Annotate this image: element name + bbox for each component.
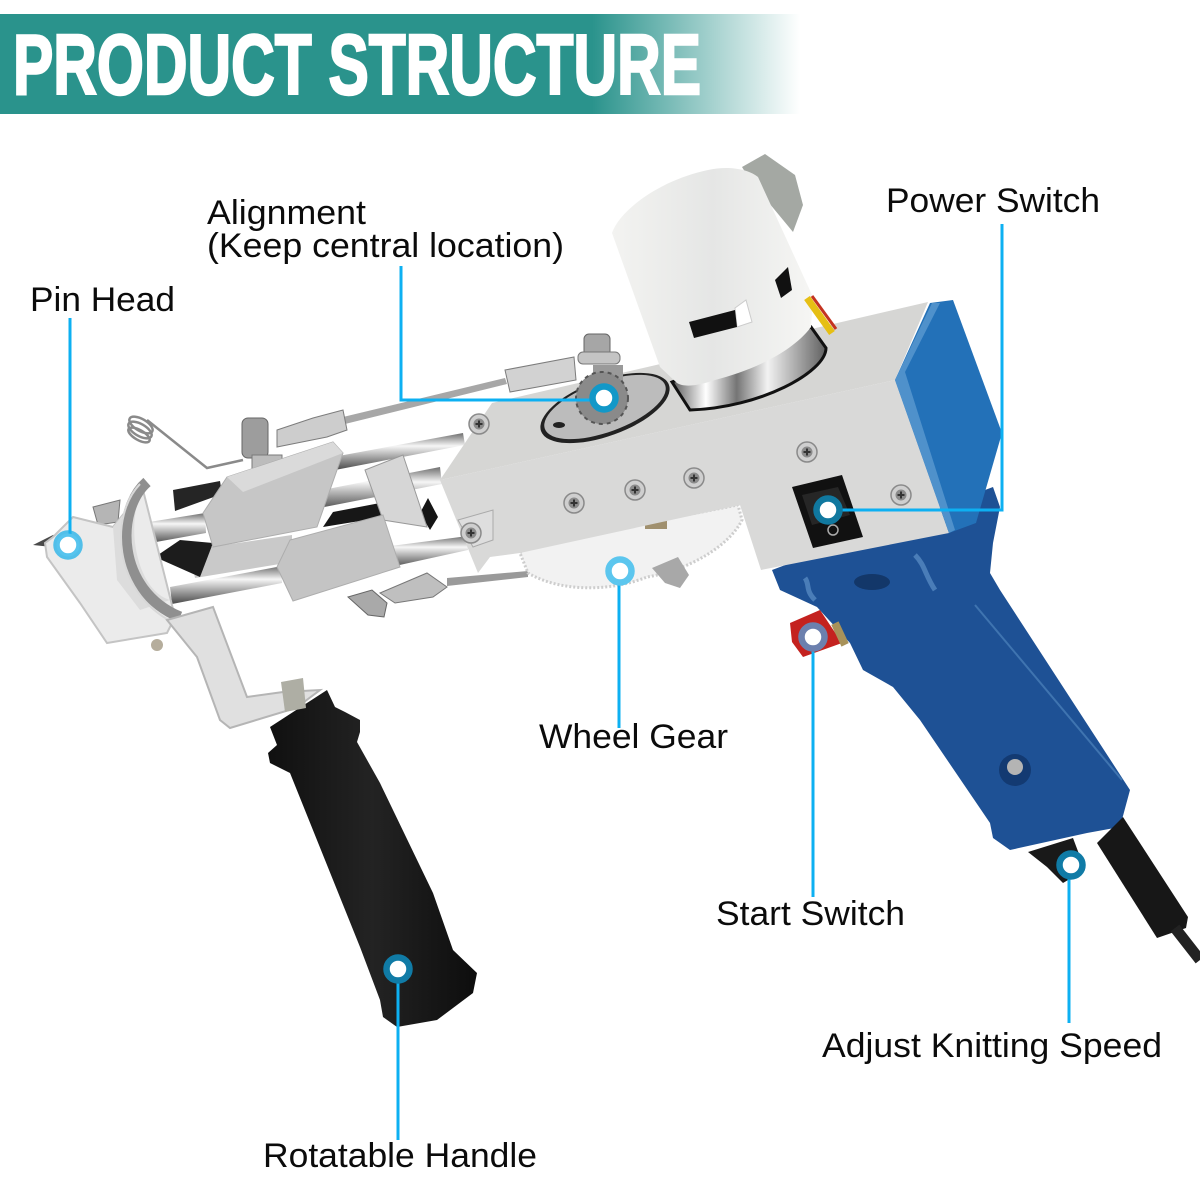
guide rods bbox=[143, 433, 468, 604]
power cable bbox=[1097, 817, 1200, 960]
callout: pin head bbox=[30, 281, 175, 556]
body screws bbox=[461, 414, 911, 543]
motor bbox=[612, 154, 836, 410]
blue end cap bbox=[895, 300, 1002, 533]
mounting bracket bbox=[167, 607, 320, 728]
callout: power switch bbox=[816, 182, 1100, 522]
wheel gear bbox=[520, 505, 742, 588]
start switch trigger bbox=[790, 610, 849, 657]
callout: adjust knitting speed: Adjust Knitting Speed bbox=[822, 1027, 1162, 1065]
callout: wheel gear: Wheel Gear bbox=[539, 718, 728, 756]
pistol grip bbox=[772, 487, 1130, 850]
machine body top bbox=[440, 302, 928, 480]
callout: wheel gear bbox=[539, 560, 728, 756]
callout: start switch bbox=[716, 626, 905, 933]
front plate, needle and guard bbox=[33, 482, 180, 651]
callout: rotatable handle: Rotatable Handle bbox=[263, 1137, 537, 1175]
wire spring bbox=[126, 413, 243, 468]
header band bbox=[0, 14, 800, 114]
sliding blocks bbox=[203, 442, 427, 601]
rotatable handle grip bbox=[268, 690, 477, 1027]
lower linkage bbox=[348, 571, 528, 617]
power switch rocker bbox=[792, 475, 863, 548]
callout: adjust knitting speed bbox=[822, 854, 1162, 1065]
callout: alignment: Alignment bbox=[207, 194, 367, 232]
callout: alignment: (Keep central location) bbox=[207, 227, 564, 265]
callout: power switch: Power Switch bbox=[886, 182, 1100, 220]
callout: rotatable handle bbox=[263, 958, 537, 1175]
machine body front bbox=[440, 380, 949, 573]
adjustment disc bbox=[532, 358, 678, 458]
side plate and small bracket bbox=[458, 510, 493, 547]
speed adjuster bbox=[1028, 838, 1085, 883]
upper linkage bbox=[242, 334, 620, 479]
callout: pin head: Pin Head bbox=[30, 281, 175, 319]
callout: alignment bbox=[207, 194, 616, 410]
tufting gun product illustration bbox=[33, 154, 1200, 1027]
callout: start switch: Start Switch bbox=[716, 895, 905, 933]
title: PRODUCT STRUCTURE bbox=[13, 18, 701, 113]
